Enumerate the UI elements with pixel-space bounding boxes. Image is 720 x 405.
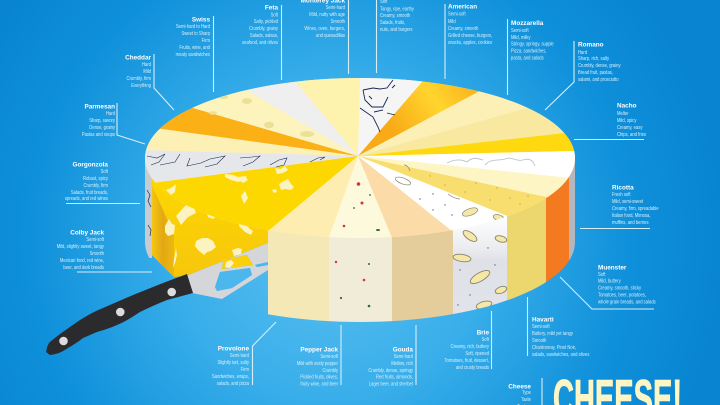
label: Ricotta: Ricotta (612, 184, 634, 192)
label: Havarti: Smooth (532, 337, 547, 344)
label: Mozzarella: pasta, and salads (511, 55, 544, 62)
label: Nacho: Mild, spicy (617, 117, 637, 124)
label: Parmesan: Dense, grainy (89, 124, 115, 131)
label: Blue: Creamy, smooth (380, 12, 411, 19)
label: Brie: Creamy, rich, buttery (451, 343, 489, 350)
label: Blue (376, 0, 414, 73)
label: American: American (448, 4, 477, 10)
label: Romano (545, 41, 621, 110)
label: American (445, 4, 493, 79)
label: Swiss: Sweet to Sharp (181, 30, 210, 37)
label: American: Grilled cheese, burgers, (448, 32, 492, 39)
wedge: ricotta (359, 151, 575, 178)
label: Mozzarella: Semi-soft (511, 27, 529, 34)
wedge: pepper jack (329, 156, 392, 238)
label: Mozzarella: Mozzarella (511, 20, 544, 27)
label: Gouda: Red fruits, almonds, (376, 374, 413, 381)
label: Parmesan (82, 103, 145, 144)
label: Havarti: salads, sandwiches, and olives (532, 351, 590, 358)
label: Mozzarella (508, 19, 554, 95)
label: Muenster: Creamy, smooth, sticky (598, 285, 642, 292)
label: Gorgonzola: spreads, and red wines (65, 195, 108, 202)
ricotta outline waves (447, 158, 535, 166)
label: Colby Jack: Mild, slightly sweet, tangy (57, 243, 104, 250)
label: Gouda: Gouda (393, 346, 413, 354)
label: Feta: Feta (265, 4, 278, 12)
label: Colby Jack: Smooth (90, 250, 104, 257)
label: Romano: salami, and prosciutto (578, 76, 619, 83)
label: Cheddar: Hard (142, 61, 151, 68)
wedge: gorgonzola (145, 150, 358, 182)
brie top dots (419, 193, 453, 216)
legend: cheese key: Taste (521, 396, 531, 403)
wedge: provolone (329, 156, 358, 236)
label: Nacho: Chips, and fries (617, 131, 646, 138)
label: Gouda: Semi-hard (394, 353, 413, 360)
label: Gouda: Mellow, rich (391, 360, 413, 367)
wedge: gouda (358, 156, 451, 237)
label: Gouda (368, 325, 416, 388)
label: Parmesan: Sharp, savory (89, 117, 115, 124)
label: American: Semi-soft (448, 11, 466, 18)
label: Romano: Romano (578, 42, 604, 48)
label: Gouda: Crumbly, dense, springy (368, 367, 413, 374)
label: Provolone: Semi-hard (230, 352, 249, 359)
label: Cheddar (125, 54, 174, 110)
wedge: romano (360, 108, 564, 156)
label: Gouda: Lager beer, and sherbet (369, 381, 414, 388)
label: Feta: Crumbly, grainy (249, 25, 278, 32)
label: American: snacks, apples, cookies (448, 39, 493, 46)
wedge: swiss (192, 90, 358, 156)
wedge: feta (246, 82, 358, 156)
label: Mozzarella: Mild, milky (511, 34, 531, 41)
label: Ricotta: Creamy, firm, spreadable (612, 205, 659, 212)
label: Pepper Jack (297, 325, 341, 388)
label: Feta: seafood, and olives (242, 39, 278, 46)
label: Gorgonzola: Salads, fruit breads, (71, 189, 108, 196)
label: Monterey Jack (301, 0, 348, 74)
label: Provolone (212, 322, 276, 387)
wedge: havarti (358, 156, 548, 216)
label: Nacho: Nacho (617, 102, 637, 110)
brie top spots (394, 165, 506, 223)
label: Gorgonzola: Gorgonzola (72, 162, 108, 168)
label: Colby Jack: beer, and dark breads (63, 264, 104, 271)
label: Colby Jack: Semi-soft (86, 236, 105, 243)
label: Swiss: Firm (202, 37, 210, 44)
label: Blue: Tangy, ripe, earthy (380, 6, 414, 13)
label: Provolone: salads, and pizza (217, 380, 249, 387)
label: Nacho: Melter (617, 110, 629, 117)
label: Mozzarella: Stringy, springy, supple (511, 41, 554, 48)
label: Cheddar: Mild (143, 68, 151, 75)
label: American: Creamy, smooth (448, 25, 479, 32)
label: Nacho: Creamy, easy (617, 124, 643, 131)
wedge: cheddar (160, 108, 358, 156)
label: Provolone: Slightly tart, salty (217, 359, 249, 366)
label: Parmesan: Hard (106, 110, 115, 117)
label: Havarti: Semi-soft (532, 323, 550, 330)
label: Parmesan: Pastas and soups (82, 131, 115, 138)
label: Brie (444, 311, 492, 371)
label: Feta (242, 4, 282, 80)
wedge: nacho (358, 133, 574, 156)
label: Monterey Jack: Smooth (331, 18, 345, 25)
label: Muenster: Soft (598, 271, 606, 278)
label: Muenster: whole grain breads, and salads (598, 299, 656, 306)
label: Pepper Jack: Pepper Jack (300, 346, 338, 354)
label: Swiss: Fruits, wine, and (179, 44, 210, 51)
wedge: blue (358, 78, 422, 156)
label: Mozzarella: Pizza, sandwiches, (511, 48, 546, 55)
knife blade openings (215, 255, 268, 291)
swiss holes (209, 95, 314, 137)
label: Provolone: Sandwiches, wraps, (212, 373, 249, 380)
label: Ricotta (580, 184, 659, 228)
knife rivets (59, 288, 176, 345)
label: Ricotta: muffins, and berries (612, 219, 649, 226)
knife handle (46, 274, 193, 355)
label: Swiss: Swiss (192, 16, 210, 24)
colby jack top blotches (166, 166, 294, 204)
label: Ricotta: Mild, semi-sweet (612, 198, 644, 205)
label: Colby Jack (57, 230, 152, 272)
label: Havarti (528, 297, 590, 358)
wedge: mozzarella (359, 92, 528, 156)
label: Gorgonzola: Crumbly, firm (84, 182, 108, 189)
label: Monterey Jack: Wines, oven, burgers, (304, 25, 345, 32)
gorgonzola veins (147, 154, 325, 167)
label: Monterey Jack: Mild, nutty with age (309, 11, 345, 18)
label: Feta: Soft (271, 12, 279, 19)
knife (46, 243, 268, 355)
label: Pepper Jack: Semi-soft (320, 353, 339, 360)
label: Parmesan: Parmesan (84, 104, 115, 110)
label: Havarti: Buttery, mild yet tangy (532, 330, 573, 337)
label: Ricotta: Fresh soft (612, 191, 631, 198)
cheese wheel (145, 78, 575, 322)
brie side rind spots (453, 228, 508, 310)
label: Pepper Jack: Crumbly (322, 367, 338, 374)
label: Romano: Crumbly, dense, grainy (578, 62, 621, 69)
label: Romano: Hard (578, 49, 587, 56)
label: Muenster: Muenster (598, 264, 627, 272)
label: Feta: Salads, salsas, (250, 32, 278, 39)
label: American: Mild (448, 18, 456, 25)
legend: cheese key: Cheese (508, 384, 531, 390)
legend: cheese key: Type (522, 389, 531, 396)
label: Pepper Jack: fruity wine, and beer (300, 381, 338, 388)
wedge: brie (358, 156, 508, 230)
knife blade (186, 243, 268, 299)
cheese wheel top wedges (145, 78, 575, 238)
brie side dots (457, 247, 496, 306)
label: Blue: Salads, fruits, (380, 19, 405, 26)
label: Swiss: Semi-hard to Hard (176, 23, 210, 30)
wedge: american (358, 82, 480, 156)
wedge: colby jack (156, 156, 358, 230)
label: Monterey Jack: Semi-hard (326, 4, 345, 11)
label: Havarti: Chardonnay, Pinot Noir, (532, 344, 576, 351)
label: Ricotta: Italian food, Mimosa, (612, 212, 650, 219)
label: Colby Jack: Mexican food, red wine, (60, 257, 104, 264)
pepper jack flecks (335, 261, 370, 307)
label: Monterey Jack: and quesadillas (316, 32, 345, 39)
havarti dots (429, 175, 529, 205)
colby jack side blotches (165, 205, 253, 268)
blue cheese veins (360, 80, 395, 132)
label: Romano: Sharp, rich, salty (578, 55, 610, 62)
wedge: monterey jack (295, 78, 358, 82)
label: Brie: Tomatoes, fruit, dessert, (444, 357, 489, 364)
label: Pepper Jack: Pickled fruits, olives, (300, 374, 338, 381)
label: Muenster: Mild, buttery (598, 278, 621, 285)
label: Cheddar: Crumbly, firm (127, 75, 151, 82)
label: Swiss: meaty sandwiches (176, 51, 210, 58)
label: Muenster (560, 264, 656, 309)
label: Muenster: Tomatoes, beer, potatoes, (598, 292, 646, 299)
label: Cheddar: Everything (131, 82, 151, 89)
label: Brie: and crusty breads (456, 364, 489, 371)
label: Nacho (574, 102, 646, 140)
label: Colby Jack: Colby Jack (70, 230, 104, 236)
label: Feta: Salty, pickled (254, 18, 278, 25)
label: Cheddar: Cheddar (125, 54, 152, 62)
label: Brie: Brie (477, 330, 489, 336)
label: Gorgonzola: Soft (101, 168, 109, 175)
label: Provolone: Provolone (218, 346, 249, 352)
label: Brie: Soft (482, 336, 490, 343)
label: Gorgonzola: Robust, spicy (83, 175, 108, 182)
wedge: parmesan (146, 128, 354, 156)
label: Havarti: Havarti (532, 316, 554, 324)
label: Brie: Soft, ripened (465, 350, 489, 357)
label: Provolone: Firm (241, 366, 249, 373)
label: Blue: nuts, and burgers (380, 26, 413, 33)
label: Gorgonzola (65, 162, 140, 204)
wedge: pale cream (360, 156, 568, 198)
label: Pepper Jack: Mild with zesty pepper (297, 360, 338, 367)
pepper jack flecks top (343, 182, 380, 231)
label: Romano: Bread fruit, pastas, (578, 69, 613, 76)
cheese wheel side faces (145, 150, 575, 330)
legend: cheese key (508, 378, 542, 405)
label: Swiss (176, 16, 214, 92)
